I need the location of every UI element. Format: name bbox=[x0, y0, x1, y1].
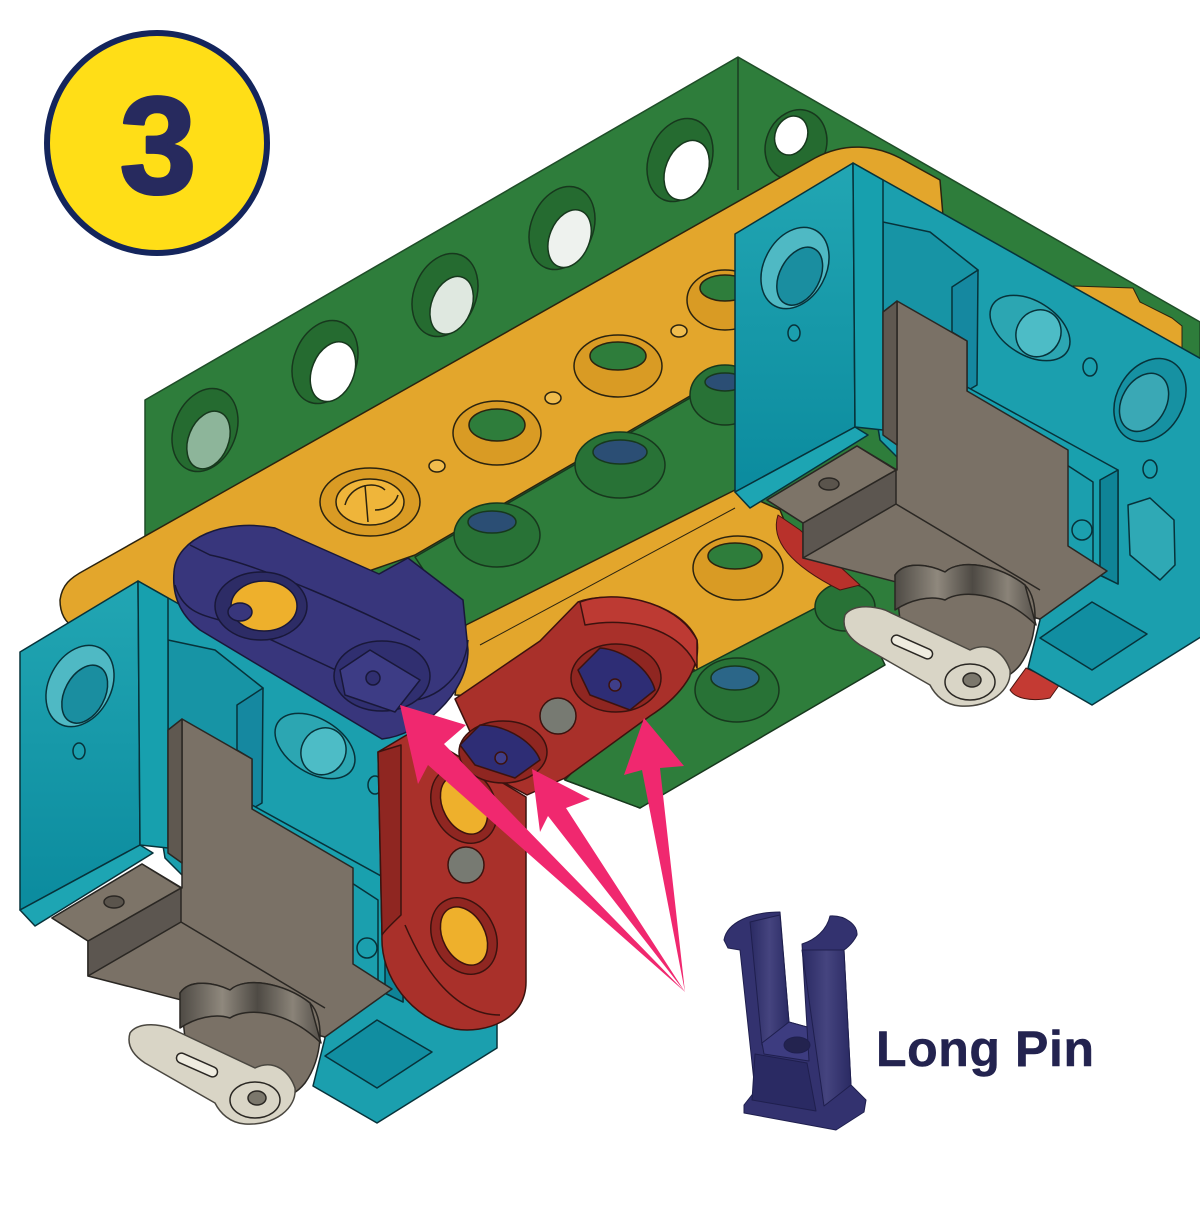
yellow lower band bbox=[455, 490, 870, 700]
arrow to navy link bbox=[400, 705, 685, 992]
step badge: 3 bbox=[120, 69, 196, 223]
right servo bracket bbox=[735, 163, 1200, 706]
navy link bbox=[174, 525, 468, 739]
teal bracket bbox=[735, 163, 1200, 705]
green lower plate bbox=[565, 583, 885, 808]
band holes bbox=[320, 468, 420, 536]
servo arm bbox=[844, 607, 1010, 706]
short pin in red link bbox=[578, 648, 655, 710]
arrow to upper pin bbox=[624, 718, 685, 992]
short pin in lower red link bbox=[460, 725, 540, 778]
yellow upper band bbox=[60, 147, 945, 650]
yellow tab behind right bracket bbox=[1070, 286, 1182, 350]
left servo bracket bbox=[20, 581, 497, 1124]
red arm behind right servo bbox=[776, 515, 1060, 700]
back plate holes bbox=[160, 100, 837, 481]
red vertical link bbox=[378, 730, 526, 1030]
label: Long Pin: Long Pin bbox=[876, 1021, 1095, 1077]
green middle strip bbox=[415, 365, 760, 628]
servo horn bbox=[895, 565, 1035, 680]
grey servo body bbox=[767, 301, 1107, 706]
red horizontal link bbox=[455, 597, 698, 795]
long pin part bbox=[724, 912, 866, 1130]
green back plate bbox=[145, 57, 1200, 808]
step badge bbox=[47, 33, 267, 253]
arrow to lower pin bbox=[532, 769, 685, 992]
arrows bbox=[400, 705, 685, 992]
